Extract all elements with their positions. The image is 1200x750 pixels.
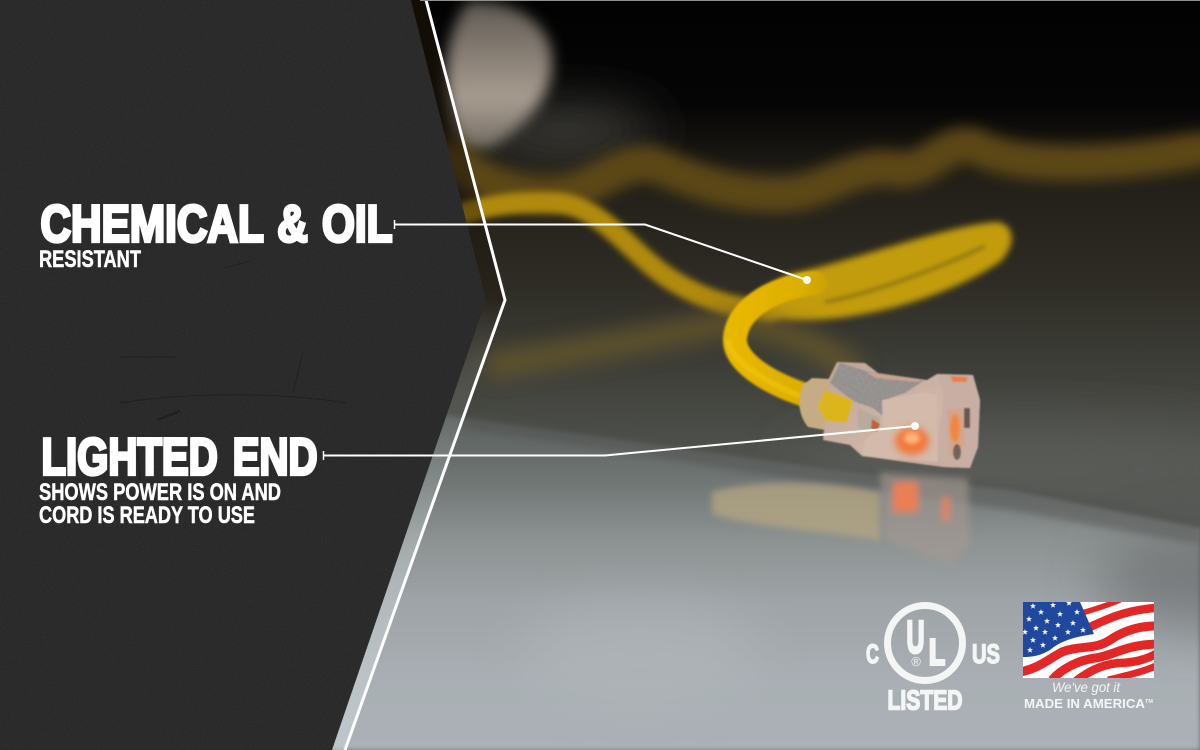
- leader line: chemical and oil to cord: [394, 220, 811, 284]
- white chevron outline: [345, 0, 505, 750]
- tagline: We've got it: [1052, 679, 1121, 695]
- listed label: LISTED: [888, 684, 962, 716]
- heading: lighted end: LIGHTED END: [42, 428, 318, 486]
- sharp yellow cord leading to plug: [728, 283, 815, 396]
- UL letter U: U: [906, 612, 924, 662]
- made in america caption: [1024, 679, 1153, 711]
- registered mark: ®: [911, 654, 921, 669]
- c mark: C: [866, 639, 879, 669]
- badge: american flag: [1020, 600, 1156, 681]
- leader line: lighted end to plug: [324, 422, 919, 460]
- blurred white object in background: [446, 2, 552, 150]
- badge: UL listed: [866, 606, 1000, 716]
- UL letter L: L: [929, 632, 945, 672]
- feature: chemical and oil resistant: [39, 196, 392, 273]
- subtext: cord is ready: CORD IS READY TO USE: [39, 502, 255, 529]
- feature: lighted end: [39, 428, 318, 529]
- trademark: TM: [1145, 699, 1153, 705]
- subtext: resistant: RESISTANT: [39, 246, 141, 273]
- subtext: shows power is on: SHOWS POWER IS ON AND: [39, 479, 281, 506]
- heading: chemical & oil: CHEMICAL & OIL: [40, 196, 392, 254]
- top edge highlight: [420, 0, 1200, 1]
- plug reflection on floor: [712, 472, 970, 565]
- made in america label: MADE IN AMERICA: [1024, 696, 1146, 711]
- lighted plug end: [799, 360, 980, 468]
- mid-distance blurred yellow cord: [465, 202, 1012, 320]
- blurred background cord: [455, 145, 1200, 195]
- cord reflection on floor: [495, 322, 850, 368]
- translucent band along panel edge: [332, 0, 505, 750]
- us mark: US: [972, 639, 1000, 669]
- dark textured side panel: [0, 0, 500, 750]
